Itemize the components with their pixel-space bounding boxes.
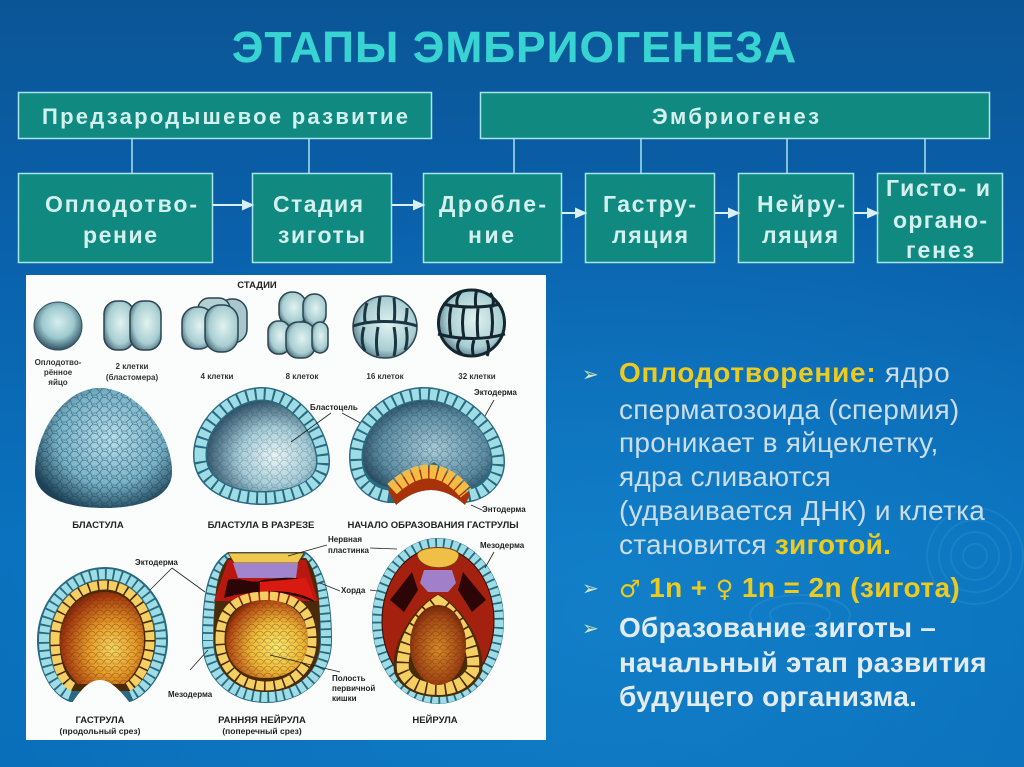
labels: row two: БЛАСТУЛА В РАЗРЕЗЕ	[208, 520, 314, 531]
illustration: early neurula	[202, 552, 332, 703]
annotation: ectoderm gastrula: Эктодерма	[135, 558, 178, 567]
annotation: blastocoel: Бластоцель	[310, 403, 358, 412]
annotation: neural plate, chord, mesoderm, gut: пластинка	[328, 546, 369, 555]
bullet: fertilisation: (удваивается ДНК) и клетка	[619, 495, 985, 526]
bullet: fertilisation: сперматозоида (спермия)	[619, 394, 959, 425]
labels: row three: ГАСТРУЛА	[75, 715, 125, 726]
box: pre-embryonic development	[18, 92, 432, 138]
labels: row two	[72, 520, 519, 531]
box: pre-embryonic development: Предзародышевое развитие	[42, 104, 408, 129]
labels: row two: БЛАСТУЛА	[72, 520, 124, 531]
box: embryogenesis	[480, 92, 990, 138]
annotation: neural plate, chord, mesoderm, gut: первичной	[332, 684, 375, 693]
box: histo- and organogenesis	[878, 174, 1002, 263]
illustration: neurula	[372, 538, 504, 704]
box: gastrulation: ляция	[612, 222, 688, 248]
bullet: zygote formation	[582, 612, 987, 712]
illustration: blastula in section	[193, 387, 330, 505]
bullet: fertilisation: проникает в яйцеклетку,	[619, 427, 939, 458]
labels: cleavage stages: яйцо	[48, 378, 68, 387]
labels: cleavage stages: 32 клетки	[458, 372, 496, 381]
labels: row three: (поперечный срез)	[222, 726, 302, 736]
labels: cleavage stages: 8 клеток	[286, 372, 319, 381]
panel: embryo stages illustration	[26, 275, 546, 740]
bullet: zygote formation: Образование зиготы –	[619, 612, 936, 643]
arrows	[213, 201, 877, 217]
flow boxes	[18, 92, 1002, 263]
labels: row three: (продольный срез)	[60, 726, 141, 736]
box: neurulation: ляция	[762, 222, 838, 248]
annotation: ectoderm gastrula	[135, 558, 205, 592]
box: gastrulation: Гастру-	[603, 191, 696, 217]
box: histo- and organogenesis: генез	[906, 237, 974, 263]
labels: cleavage stages: 4 клетки	[201, 372, 234, 381]
bullet: fertilisation: становится зиготой.	[619, 529, 891, 560]
box: histo- and organogenesis: Гисто- и	[886, 175, 990, 201]
annotation: blastocoel	[291, 403, 366, 442]
labels: cleavage stages: Оплодотво-	[35, 358, 82, 367]
labels: cleavage stages: 16 клеток	[366, 372, 405, 381]
annotation: ectoderm and endoderm	[471, 388, 526, 514]
box: histo- and organogenesis: органо-	[893, 207, 987, 233]
labels: cleavage stages: (бластомера)	[106, 373, 159, 382]
box: zygote stage: зиготы	[278, 222, 365, 248]
bullet: fertilisation: Оплодотворение: ядро	[619, 357, 950, 388]
annotation: ectoderm and endoderm: Энтодерма	[482, 505, 526, 514]
icon: fertilised egg	[34, 302, 82, 350]
box: neurulation	[738, 174, 854, 262]
box: cleavage	[424, 174, 562, 262]
icon: sixteen cells	[353, 296, 417, 358]
box: zygote stage: Стадия	[273, 191, 363, 217]
box: cleavage: Дробле-	[439, 191, 546, 217]
labels: cleavage stages: 2 клетки	[116, 362, 149, 371]
icon: two cells	[104, 301, 161, 350]
illustration: gastrula	[37, 567, 168, 703]
box: zygote stage	[252, 174, 392, 262]
annotation: neural plate, chord, mesoderm, gut: Мезодерма	[168, 690, 213, 699]
icon: eight cells	[268, 292, 328, 358]
annotation: neural plate, chord, mesoderm, gut	[168, 535, 397, 703]
labels: row three	[60, 714, 458, 736]
box: cleavage: ние	[468, 222, 514, 248]
labels: row three: РАННЯЯ НЕЙРУЛА	[218, 714, 306, 726]
annotation: neural plate, chord, mesoderm, gut: Нервная	[328, 535, 362, 544]
icon: four cells	[182, 298, 247, 352]
annotation: neural plate, chord, mesoderm, gut: Полость	[332, 674, 366, 683]
box: fertilisation	[18, 174, 212, 262]
bullet: zygote formation: будущего организма.	[619, 681, 917, 712]
illustration: start of gastrulation	[349, 387, 505, 505]
title: ЭТАПЫ ЭМБРИОГЕНЕЗА	[232, 23, 796, 72]
annotation: neural plate, chord, mesoderm, gut: Хорда	[341, 586, 366, 595]
labels: cleavage stages: рённое	[44, 368, 73, 377]
bullet: fertilisation	[582, 357, 985, 560]
connector lines	[132, 139, 925, 173]
box: fertilisation: рение	[83, 222, 157, 248]
labels: row three: НЕЙРУЛА	[412, 714, 458, 726]
box: embryogenesis: Эмбриогенез	[652, 104, 819, 129]
bullet: fertilisation: ➢	[582, 364, 599, 386]
box: gastrulation	[586, 174, 714, 262]
labels: cleavage stages	[35, 358, 496, 387]
label: stages heading: СТАДИИ	[237, 280, 277, 291]
annotation: mesoderm neurula: Мезодерма	[480, 541, 525, 550]
bullet: fertilisation: ядра сливаются	[619, 461, 831, 492]
box: neurulation: Нейру-	[757, 191, 845, 217]
box: fertilisation: Оплодотво-	[45, 191, 197, 217]
bullet: zygote formation: начальный этап развития	[619, 647, 987, 678]
annotation: ectoderm and endoderm: Эктодерма	[474, 388, 517, 397]
annotation: neural plate, chord, mesoderm, gut: кишки	[332, 694, 357, 703]
bullet: zygote formation: ➢	[582, 618, 599, 640]
annotation: mesoderm neurula	[480, 541, 525, 568]
illustration: blastula	[35, 388, 172, 508]
bullet list	[582, 357, 987, 712]
labels: row two: НАЧАЛО ОБРАЗОВАНИЯ ГАСТРУЛЫ	[347, 520, 519, 531]
icon: thirty-two cells	[438, 289, 505, 357]
bullet: formula: ➢	[582, 578, 599, 600]
bullet: formula: ♂ 1n + ♀ 1n = 2n (зигота)	[619, 572, 960, 603]
